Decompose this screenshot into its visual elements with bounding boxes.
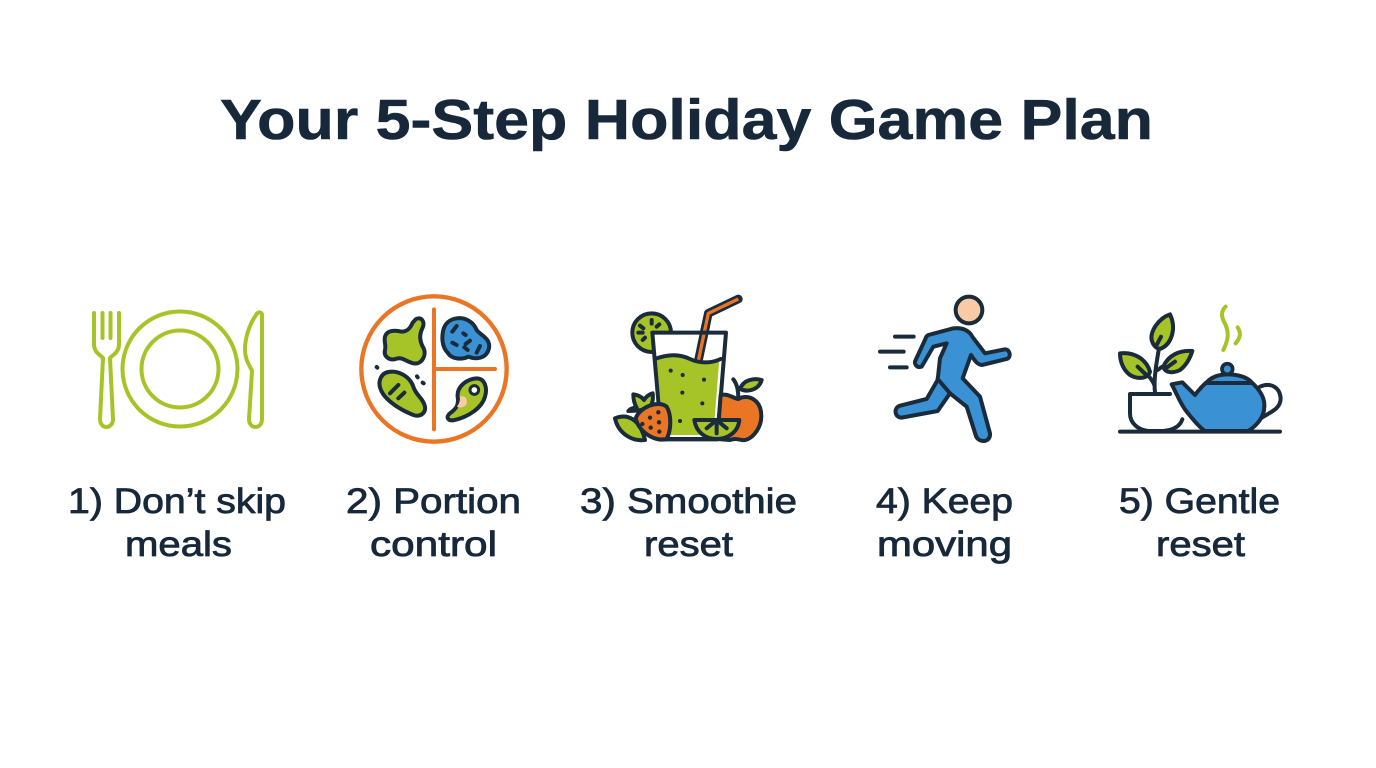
teapot handle <box>1260 385 1281 418</box>
icon: plant and teapot <box>1120 307 1281 432</box>
icon: runner <box>880 297 1010 441</box>
label: step 3 <box>580 482 797 564</box>
icon: fork, plate and knife <box>94 312 262 427</box>
steam <box>1222 307 1240 350</box>
strawberry <box>636 404 670 440</box>
teapot <box>1172 374 1264 431</box>
left leaf <box>615 417 645 440</box>
label: step 1: meals <box>125 525 232 564</box>
label: step 3: reset <box>644 525 733 564</box>
label: step 2: 2) Portion <box>346 482 521 521</box>
label: step 5: reset <box>1156 525 1245 564</box>
label: step 5 <box>1119 482 1280 564</box>
glass <box>652 333 726 439</box>
label: step 4: 4) Keep <box>876 482 1013 521</box>
kiwi slice <box>632 313 671 352</box>
label: step 1: 1) Don’t skip <box>68 482 286 521</box>
label: step 3: 3) Smoothie <box>580 482 797 521</box>
apple <box>717 379 762 440</box>
label: step 2: control <box>370 525 497 564</box>
straw <box>698 299 738 361</box>
icon: portion plate <box>361 296 507 442</box>
lime half <box>694 420 739 439</box>
bowl <box>1130 394 1182 431</box>
label: step 1 <box>68 482 286 564</box>
label: step 5: 5) Gentle <box>1119 482 1280 521</box>
label: step 4 <box>876 482 1013 564</box>
label: step 2 <box>346 482 521 564</box>
strawberry leaves <box>628 393 653 411</box>
title: Your 5-Step Holiday Game Plan <box>220 88 1153 152</box>
plant <box>1120 314 1192 392</box>
icon: smoothie with fruit <box>615 299 762 440</box>
label: step 4: moving <box>877 525 1012 564</box>
